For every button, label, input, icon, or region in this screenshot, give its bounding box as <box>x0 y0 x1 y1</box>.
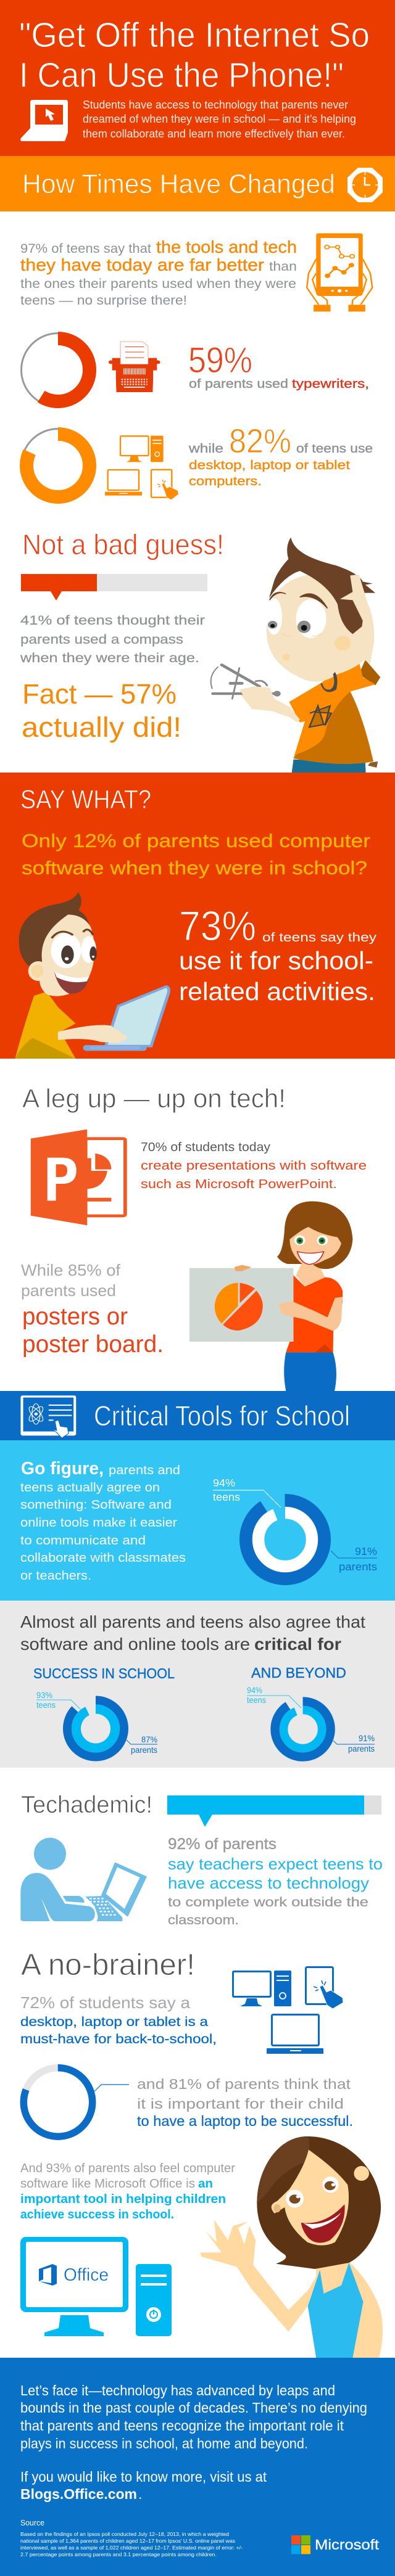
text: 92 percent of parents: have access to technology <box>168 1874 369 1892</box>
callout: fact 57 percent <box>22 678 181 743</box>
heading: Not a bad guess! <box>22 528 224 560</box>
icon: blue computers <box>233 1967 343 2054</box>
text: 92 percent of parents: to complete work outside the <box>168 1895 368 1909</box>
text: 93 percent of parents: important tool in helping children <box>20 2192 226 2206</box>
text: almost all parents: software and online tools are <box>20 1635 250 1654</box>
panel: critical for success <box>0 1601 395 1768</box>
intro text: Students have access to technology that parents never <box>83 98 348 111</box>
stat: 59 percent typewriters <box>188 340 369 391</box>
text: only 12 percent: software when they were in school? <box>22 857 367 879</box>
chart: success in school donut: parents <box>131 1745 157 1755</box>
stat: 73 percent <box>179 903 376 1006</box>
chart: teens and parents donut: parents <box>339 1561 377 1573</box>
heading: A no-brainer! <box>21 1948 195 1982</box>
chart: teens and parents donut: 94% <box>213 1477 235 1489</box>
stat: 82 percent teens: of teens use <box>296 442 373 456</box>
text: 81 percent of parents: and 81% of parents think that <box>137 2076 351 2092</box>
source note: national sample of 1,364 parents of children aged 12–17 from Ipsos’ U.S. online panel was <box>20 2538 235 2544</box>
text: almost all parents <box>20 1612 365 1654</box>
text: compass guess: when they were their age. <box>20 651 199 665</box>
title: I Can Use the Phone!" <box>19 55 344 95</box>
text: compass guess: parents used a compass <box>20 633 183 647</box>
banner: how times have changed <box>0 156 395 211</box>
icon: clock <box>347 168 383 202</box>
text block: 97 percent of teens: 97% of teens say that <box>20 242 151 256</box>
illustration: boy with compass <box>211 538 380 773</box>
chart: teens and parents donut: teens <box>213 1491 240 1503</box>
text: 85 percent of parents <box>21 1261 164 1358</box>
heading: A leg up — up on tech! <box>22 1084 286 1114</box>
text: 70 percent of students <box>141 1140 367 1191</box>
icon: orange computers <box>105 436 178 500</box>
text: 85 percent of parents: posters or <box>22 1303 128 1330</box>
closing text: If you would like to know more, visit us at <box>20 2469 267 2485</box>
panel: a leg up <box>21 1084 367 1391</box>
intro text: dreamed of when they were in school — and it’s helping <box>83 112 356 125</box>
text block: 97 percent of teens: they have today are far better <box>20 255 264 274</box>
text: only 12 percent <box>22 830 370 879</box>
banner: critical tools for school <box>0 1391 395 1440</box>
text block: something: Software and <box>20 1498 172 1512</box>
heading: and beyond: AND BEYOND <box>251 1665 346 1681</box>
text: 85 percent of parents: poster board. <box>22 1331 164 1358</box>
closing text <box>20 2382 367 2502</box>
stat: 73 percent: related activities. <box>179 977 375 1006</box>
panel: go figure <box>0 1440 395 1601</box>
stat: 73 percent: 73% <box>179 903 256 950</box>
illustration: woman with poster <box>189 1201 352 1391</box>
stat: 82 percent teens: 82% <box>229 422 291 460</box>
stat: 59 percent typewriters: typewriters, <box>292 377 369 391</box>
text block: online tools make it easier <box>20 1516 177 1530</box>
title: "Get Off the Internet So <box>19 15 370 55</box>
text: 85 percent of parents: parents used <box>21 1281 116 1300</box>
icon: PowerPoint logo <box>31 1130 125 1225</box>
chart: teens and parents donut: 91% <box>355 1545 377 1557</box>
chart: success in school donut: teens <box>36 1700 56 1710</box>
callout: fact 57 percent: Fact — 57% <box>22 678 177 710</box>
text block <box>20 1459 186 1583</box>
text: 81 percent of parents <box>137 2076 353 2129</box>
icon: person at laptop <box>20 1838 146 1921</box>
illustration: woman waving <box>200 2136 383 2358</box>
text block: Go figure, <box>21 1459 104 1479</box>
text block: 97 percent of teens <box>20 237 297 308</box>
chart: and beyond donut: parents <box>348 1744 375 1754</box>
text: 92 percent of parents: classroom. <box>168 1913 239 1927</box>
source note: Source <box>20 2519 44 2527</box>
source note: interviewed, as well as a sample of 1,022 children aged 12–17. Estimated margin of error: +/- <box>20 2545 243 2551</box>
text: 93 percent of parents: achieve success in school. <box>20 2208 174 2221</box>
stat: 82 percent teens <box>188 422 373 488</box>
text: 70 percent of students: create presentations with software <box>141 1159 367 1173</box>
stat: 73 percent: of teens say they <box>262 931 376 945</box>
heading: SAY WHAT? <box>20 785 151 814</box>
intro text <box>83 98 356 140</box>
text: 93 percent of parents: an <box>198 2177 213 2191</box>
icon: hands holding tablet <box>307 233 372 311</box>
stat: 73 percent: use it for school- <box>179 946 373 975</box>
chart: and beyond donut: 91% <box>359 1733 375 1743</box>
closing text: Blogs.Office.com <box>20 2486 137 2502</box>
panel: techademic <box>20 1792 383 1927</box>
closing text: . <box>138 2486 142 2502</box>
text: 93 percent of parents <box>20 2162 235 2221</box>
text block: teens actually agree on <box>20 1480 160 1495</box>
text block: collaborate with classmates <box>20 1551 186 1565</box>
chart: and beyond donut <box>247 1685 375 1757</box>
text: 93 percent of parents: software like Microsoft Office is <box>20 2177 195 2191</box>
heading: success in school: SUCCESS IN SCHOOL <box>33 1665 175 1681</box>
heading: Techademic! <box>21 1792 152 1818</box>
icon: desktop with Office <box>20 2237 172 2336</box>
text block: or teachers. <box>20 1569 91 1583</box>
closing text: Let’s face it—technology has advanced by leaps and <box>20 2382 335 2398</box>
Microsoft logo <box>291 2535 380 2554</box>
chart: and beyond donut: teens <box>247 1695 266 1705</box>
text: 72 percent of students: 72% of students say a <box>20 1993 191 2012</box>
text: 72 percent of students: must-have for back-to-school, <box>20 2032 217 2046</box>
text: 70 percent of students: 70% of students today <box>141 1140 271 1154</box>
source note <box>20 2519 243 2558</box>
text: 85 percent of parents: While 85% of <box>21 1261 121 1279</box>
icon: typewriter <box>109 342 160 392</box>
stat: 59 percent typewriters: 59% <box>188 340 252 380</box>
text: 70 percent of students: such as Microsoft PowerPoint. <box>141 1177 337 1191</box>
text: 93 percent of parents: And 93% of parents also feel computer <box>20 2162 235 2175</box>
source note: 2.7 percentage points among parents and 3.1 percentage points among children. <box>20 2551 217 2558</box>
text: 92 percent of parents: 92% of parents <box>168 1836 276 1853</box>
text block: parents and <box>109 1463 180 1477</box>
text: almost all parents: critical for <box>254 1635 341 1654</box>
text: compass guess <box>20 613 205 665</box>
text: 72 percent of students <box>20 1993 217 2046</box>
Microsoft logo: Microsoft <box>315 2537 380 2553</box>
icon: tablet with atom <box>20 1395 76 1438</box>
closing text: that parents and teens recognize the important role it <box>20 2418 344 2434</box>
bar chart: 92 percent <box>167 1795 381 1827</box>
text: compass guess: 41% of teens thought their <box>20 613 205 628</box>
Office wordmark: Office <box>64 2265 109 2285</box>
chart: 59 percent donut <box>21 333 95 407</box>
illustration: boy with laptop <box>15 892 169 1059</box>
text: 92 percent of parents: say teachers expect teens to <box>168 1855 383 1873</box>
text: only 12 percent: Only 12% of parents used computer <box>22 830 370 851</box>
intro text: them collaborate and learn more effectively than ever. <box>83 127 345 140</box>
stat: 82 percent teens: desktop, laptop or tablet <box>189 459 351 472</box>
closing text: bounds in the past couple of decades. There’s no denying <box>20 2400 367 2416</box>
text: 81 percent of parents: to have a laptop to be successful. <box>137 2113 353 2129</box>
stat: 59 percent typewriters: of parents used <box>189 377 288 391</box>
panel: header <box>0 0 395 156</box>
title <box>19 15 370 95</box>
icon: laptop with cursor <box>20 100 68 141</box>
chart: 81 percent donut <box>23 2068 129 2136</box>
text: 92 percent of parents <box>168 1836 383 1927</box>
panel: a no-brainer <box>20 1948 353 2136</box>
text: almost all parents: Almost all parents and teens also agree that <box>20 1612 365 1631</box>
text block: 97 percent of teens: the tools and tech <box>156 237 297 256</box>
chart: 82 percent donut <box>21 429 95 502</box>
heading: How Times Have Changed <box>22 169 335 199</box>
bar chart: 41 percent <box>21 574 207 601</box>
text block: to communicate and <box>20 1533 146 1548</box>
chart: success in school donut: 87% <box>141 1734 157 1744</box>
text block: 97 percent of teens: than <box>269 260 297 274</box>
stat: 82 percent teens: while <box>188 442 223 456</box>
chart: teens and parents donut <box>213 1477 377 1578</box>
stat: 82 percent teens: computers. <box>189 475 262 488</box>
text block: 97 percent of teens: teens — no surprise there! <box>20 293 187 308</box>
heading: Critical Tools for School <box>94 1400 350 1432</box>
chart: and beyond donut: 94% <box>247 1685 262 1695</box>
panel: footer <box>0 2358 395 2576</box>
chart: success in school donut <box>36 1690 157 1757</box>
closing text: plays in success in school, at home and beyond. <box>20 2435 308 2451</box>
text: 72 percent of students: desktop, laptop or tablet is a <box>20 2015 208 2029</box>
source note: Based on the findings of an Ipsos poll conducted July 12–18, 2013, in which a weighted <box>20 2531 229 2537</box>
icon: Office logo <box>39 2264 57 2286</box>
text: 81 percent of parents: it is important for their child <box>137 2096 344 2112</box>
chart: success in school donut: 93% <box>36 1690 52 1700</box>
text block: 97 percent of teens: the ones their parents used when they were <box>20 277 296 291</box>
panel: say what <box>0 773 395 1059</box>
callout: fact 57 percent: actually did! <box>22 712 181 743</box>
panel: not a bad guess <box>20 528 224 743</box>
